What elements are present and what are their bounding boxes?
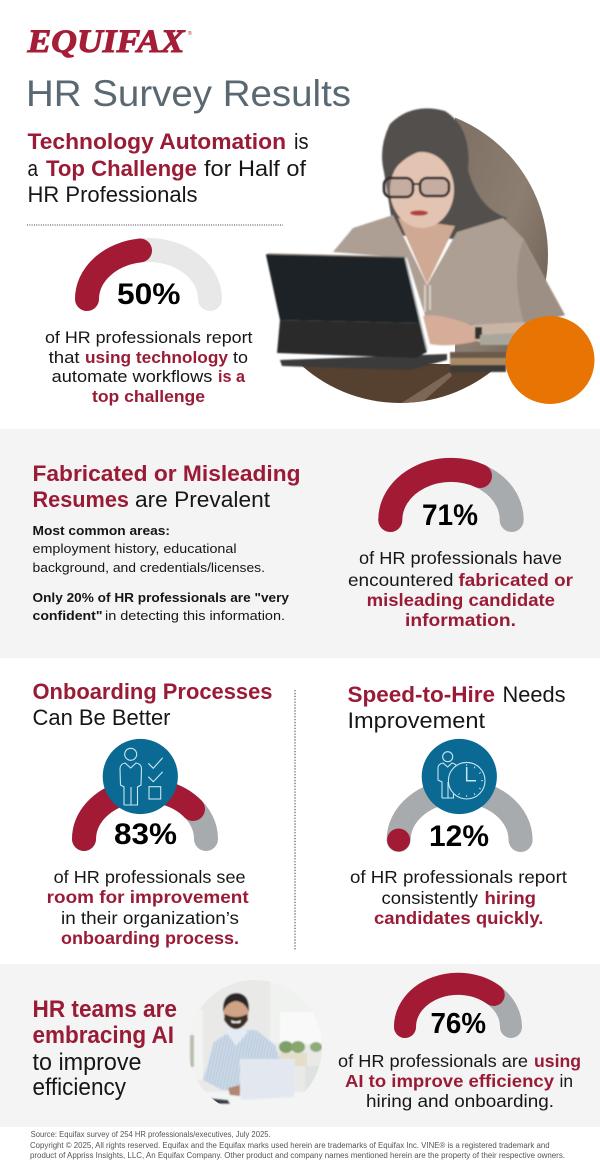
gauge: 83%: 83%: [114, 818, 177, 851]
text: 83% description: [47, 867, 249, 948]
text: 50% description: [45, 329, 253, 406]
gauge: 50%: 50%: [117, 278, 180, 311]
text: 71% description: encountered: [348, 570, 454, 590]
heading: technology automation: for Half of: [204, 156, 307, 181]
text: 76% description: hiring and onboarding.: [366, 1091, 554, 1111]
title: HR Survey Results: [26, 73, 351, 114]
footer: source and copyright: Copyright © 2025, All rights reserved. Equifax and the Equifax marks used herein are trademarks of Equifax Inc. VINE® is a registered trademark and: [30, 1141, 550, 1150]
text: 76% description: [338, 1051, 581, 1111]
text: 71% description: information.: [405, 610, 516, 630]
gauge: 76%: 76%: [430, 1008, 486, 1040]
accent: orange circle: [506, 316, 594, 404]
text: 12% description: hiring: [484, 888, 536, 908]
heading: HR teams embracing AI: embracing AI: [32, 1022, 174, 1049]
text: 12% description: of HR professionals report: [350, 867, 567, 887]
heading: HR teams embracing AI: [32, 996, 177, 1101]
text: 76% description: in: [560, 1071, 573, 1091]
photo: woman using a tablet: [250, 100, 565, 410]
heading: fabricated or misleading resumes: Resumes: [32, 487, 129, 512]
text: 76% description: of HR professionals are: [338, 1051, 528, 1071]
logo: Equifax: EQUIFAX: [26, 24, 186, 60]
heading: speed-to-hire: Improvement: [348, 708, 486, 733]
heading: speed-to-hire: Needs: [502, 682, 566, 707]
heading: technology automation: Top Challenge: [46, 156, 197, 181]
text: most common areas: Most common areas:: [32, 523, 170, 538]
heading: technology automation: Technology Automation: [28, 129, 286, 154]
gauge: 71%: [390, 470, 512, 532]
text: 12% description: [350, 867, 567, 928]
text: most common areas: [32, 523, 265, 575]
heading: fabricated or misleading resumes: [32, 461, 300, 512]
heading: fabricated or misleading resumes: Fabricated or Misleading: [32, 461, 300, 486]
text: 12% description: consistently: [382, 888, 478, 908]
text: most common areas: background, and credentials/licenses.: [32, 560, 265, 575]
heading: technology automation: HR Professionals: [28, 182, 198, 207]
gauge: 50%: [87, 250, 210, 311]
text: 83% description: in their organization’s: [61, 908, 239, 928]
heading: onboarding processes: [32, 679, 272, 730]
heading: speed-to-hire: [348, 682, 566, 733]
heading: onboarding processes: Can Be Better: [32, 705, 171, 730]
gauge: 12%: [387, 791, 521, 853]
heading: HR teams embracing AI: efficiency: [32, 1074, 127, 1101]
text: confidence note: confident": [32, 608, 102, 623]
text: 12% description: candidates quickly.: [374, 908, 543, 928]
icon: person with clock: [422, 739, 497, 814]
text: 50% description: automate workflows: [52, 368, 212, 386]
text: 76% description: using: [534, 1051, 581, 1071]
text: 50% description: to: [233, 349, 248, 367]
text: 83% description: onboarding process.: [61, 928, 239, 948]
text: 50% description: of HR professionals report: [45, 329, 253, 347]
panel: AI efficiency: [0, 964, 600, 1128]
text: 71% description: of HR professionals have: [359, 548, 562, 568]
panel: fabricated resumes: [0, 429, 600, 658]
gauge: 12%: 12%: [429, 820, 489, 853]
footer: source and copyright: [30, 1130, 565, 1160]
photo: smiling man at laptop: [189, 980, 322, 1105]
heading: onboarding processes: Onboarding Processes: [32, 679, 272, 704]
text: 50% description: using technology: [85, 349, 229, 367]
text: 71% description: [348, 548, 573, 630]
heading: fabricated or misleading resumes: are Prevalent: [135, 487, 271, 512]
heading: HR teams embracing AI: HR teams are: [32, 996, 177, 1023]
text: 50% description: top challenge: [92, 388, 205, 406]
logo: Equifax: ®: [188, 30, 192, 37]
text: 76% description: AI to improve efficiency: [345, 1071, 554, 1091]
text: 71% description: fabricated or: [458, 570, 573, 590]
heading: speed-to-hire: Speed-to-Hire: [348, 682, 495, 707]
footer: source and copyright: product of Appriss Insights, LLC, An Equifax Company. Other product and company names mentioned herein are the property of their respective owners.: [30, 1151, 565, 1160]
gauge: 71%: 71%: [422, 499, 478, 532]
heading: technology automation: a: [28, 156, 38, 181]
text: confidence note: in detecting this information.: [105, 608, 285, 623]
text: 50% description: that: [49, 349, 80, 367]
heading: technology automation: is: [294, 129, 308, 154]
text: 50% description: is a: [218, 368, 246, 386]
text: 83% description: room for improvement: [47, 887, 249, 907]
gauge: 76%: [405, 984, 511, 1040]
text: most common areas: employment history, educational: [32, 541, 237, 556]
gauge: 83%: [84, 790, 206, 851]
text: confidence note: [32, 590, 290, 623]
footer: source and copyright: Source: Equifax survey of 254 HR professionals/executives, July 2025.: [31, 1130, 271, 1139]
text: confidence note: Only 20% of HR professionals are "very: [32, 590, 290, 605]
text: 83% description: of HR professionals see: [54, 867, 246, 887]
heading: HR teams embracing AI: to improve: [32, 1049, 142, 1076]
icon: person with checklist: [103, 739, 178, 814]
text: 71% description: misleading candidate: [367, 590, 555, 610]
heading: technology automation: [28, 129, 308, 207]
